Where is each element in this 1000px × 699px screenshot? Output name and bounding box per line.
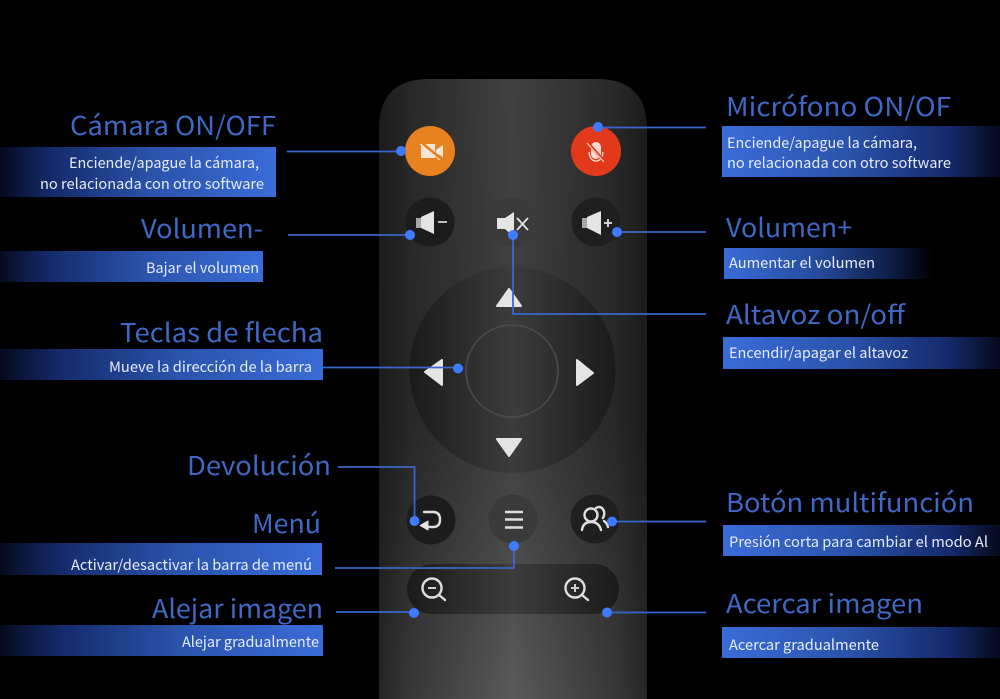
callout: speaker: Encendir/apagar el altavoz	[729, 342, 908, 363]
button: multifunction	[570, 494, 620, 544]
callout: arrow keys: Teclas de flecha	[120, 313, 323, 350]
callout: microphone: Enciende/apague la cámara,	[727, 132, 917, 153]
callout: volume up: Aumentar el volumen	[729, 252, 875, 273]
callout: zoom in	[602, 584, 1000, 658]
callout: camera: no relacionada con otro software	[40, 173, 264, 194]
callout: microphone	[593, 87, 1000, 177]
arrow left	[425, 360, 442, 385]
callout: arrow keys: Mueve la dirección de la barra	[109, 356, 312, 377]
callout: return	[187, 446, 420, 526]
callout: volume up: Volumen+	[726, 208, 852, 245]
callout: menu	[0, 504, 519, 575]
arrow up	[497, 289, 521, 306]
callout: volume down: Volumen-	[141, 209, 263, 246]
remote control	[379, 79, 647, 699]
arrow right	[577, 360, 593, 385]
callout: zoom out	[0, 589, 419, 656]
button: camera	[405, 126, 455, 176]
callout: multifunction	[607, 483, 1000, 556]
callout: zoom out: Alejar gradualmente	[182, 631, 319, 652]
callout: volume down: Bajar el volumen	[146, 257, 259, 278]
callout: camera	[0, 106, 406, 197]
callout: camera: Cámara ON/OFF	[70, 106, 276, 143]
button: microphone	[571, 126, 621, 176]
button: volume down	[406, 198, 454, 246]
button: volume up	[572, 198, 620, 246]
icon: zoom out	[422, 578, 445, 600]
callout: speaker: Altavoz on/off	[726, 295, 906, 332]
callout: menu: Activar/desactivar la barra de menú	[71, 554, 312, 575]
callout: zoom out: Alejar imagen	[152, 589, 323, 626]
callout: menu: Menú	[252, 504, 321, 541]
icon: zoom in	[566, 578, 588, 600]
callout: zoom in: Acercar gradualmente	[729, 634, 879, 655]
callout: volume down	[0, 209, 415, 282]
callout: microphone: Micrófono ON/OF	[726, 87, 951, 124]
button: zoom bar	[407, 564, 619, 614]
callout: speaker	[508, 230, 1000, 369]
callout: return: Devolución	[187, 446, 331, 483]
button: mute	[488, 198, 538, 246]
button: menu	[488, 494, 538, 544]
button: return	[406, 496, 456, 544]
callout: multifunction: Presión corta para cambiar el modo Al	[729, 531, 988, 552]
directional pad	[410, 267, 616, 473]
callout: zoom in: Acercar imagen	[726, 584, 923, 621]
callout: camera: Enciende/apague la cámara,	[69, 152, 259, 173]
arrow down	[497, 439, 521, 456]
callout: arrow keys	[0, 313, 463, 380]
callout: multifunction: Botón multifunción	[726, 483, 974, 520]
callout: microphone: no relacionada con otro software	[727, 152, 951, 173]
callout: volume up	[612, 208, 932, 279]
